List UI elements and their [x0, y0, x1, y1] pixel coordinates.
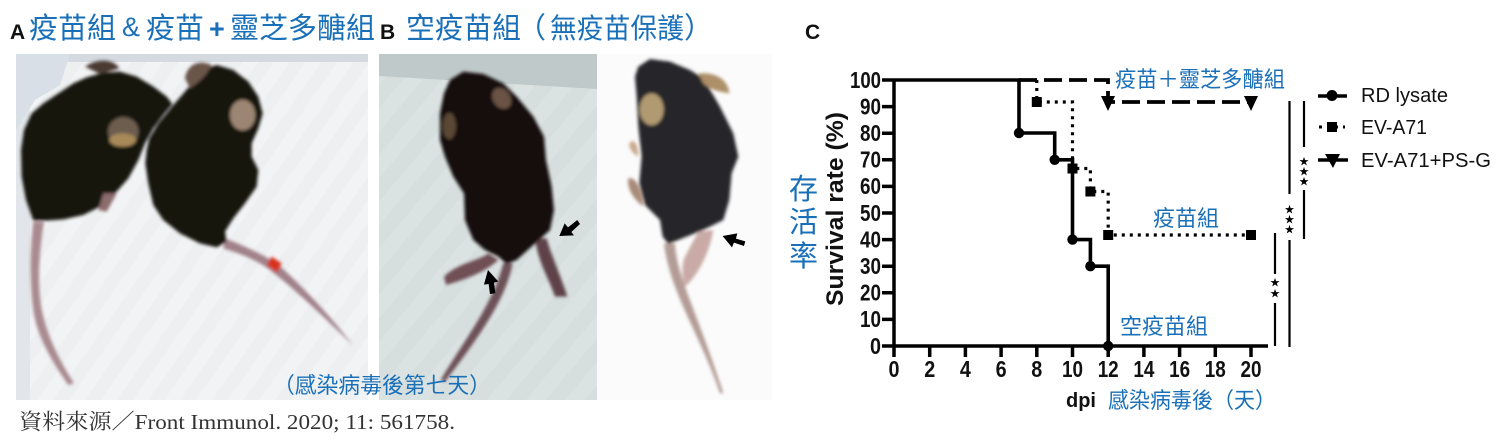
significance brackets: ★ — [1284, 212, 1295, 226]
heading: panel B: ） — [684, 13, 713, 45]
heading: panel A: 疫苗 — [146, 12, 204, 45]
heading: panel B: 空疫苗組 — [406, 12, 521, 45]
series: RD lysate solid — [894, 80, 1113, 351]
heading: panel A: & — [122, 12, 140, 42]
x tick labels: 10 — [1062, 356, 1083, 382]
y tick labels: 70 — [860, 146, 881, 172]
heading: panel B: 無疫苗保護 — [550, 13, 684, 44]
y axis label: Survival rate: Survival rate (%) — [822, 112, 849, 306]
arrow: right hind leg — [559, 220, 580, 236]
y tick labels: 10 — [860, 306, 881, 332]
chart: survival curves — [789, 67, 1491, 413]
x tick labels: 4 — [960, 356, 971, 382]
heading: panel B — [380, 12, 713, 45]
significance brackets: ★ — [1270, 276, 1280, 290]
photo: unvaccinated mouse, white background — [597, 54, 772, 400]
y axis label: Chinese: 存 — [789, 173, 818, 206]
x tick labels — [888, 356, 1262, 382]
x tick labels: 12 — [1098, 356, 1119, 382]
significance brackets: ★ — [1299, 164, 1309, 178]
significance brackets: ★ — [1299, 154, 1309, 168]
heading: panel A: A — [10, 21, 25, 44]
x tick labels: 2 — [924, 356, 935, 382]
curve label: vaccine + PS-G: 疫苗＋靈芝多醣組 — [1115, 67, 1285, 92]
x tick labels: 0 — [888, 356, 900, 382]
photo: vaccinated mice — [16, 54, 368, 400]
x tick labels: 6 — [996, 356, 1007, 382]
caption: day 7 after infection: （感染病毒後第七天） — [273, 373, 491, 398]
significance brackets — [1270, 101, 1309, 347]
y axis label: Chinese: 活 — [789, 206, 818, 239]
significance brackets: ★ — [1284, 202, 1295, 216]
y tick labels: 60 — [860, 173, 881, 199]
series: EV-A71+PS-G dashed — [1019, 80, 1258, 111]
heading: panel A — [10, 12, 375, 45]
y tick labels: 0 — [870, 333, 881, 359]
legend: EV-A71+PS-G — [1361, 150, 1491, 172]
x tick labels: 18 — [1205, 356, 1226, 382]
arrow: left hind leg — [484, 270, 498, 294]
y tick labels: 20 — [860, 280, 881, 306]
arrow: right photo leg — [723, 233, 745, 247]
significance brackets: ★ — [1270, 286, 1280, 300]
legend: EV-A71 — [1361, 117, 1427, 139]
photo: unvaccinated mouse, grey background — [379, 54, 597, 400]
heading: panel A: + — [209, 14, 225, 44]
legend — [1318, 85, 1491, 172]
x tick labels: 14 — [1133, 356, 1155, 382]
y tick labels: 100 — [850, 67, 881, 93]
y tick labels: 80 — [860, 120, 881, 146]
source note: 資料來源／Front Immunol. 2020; 11: 561758. — [19, 410, 455, 434]
series: EV-A71 dotted — [1032, 80, 1256, 240]
y tick labels: 30 — [860, 253, 881, 279]
y tick labels: 50 — [860, 200, 881, 226]
x axis label: Chinese: 感染病毒後（天） — [1108, 388, 1276, 413]
heading: panel A: 靈芝多醣組 — [230, 12, 375, 45]
heading: panel C: C — [805, 21, 820, 44]
legend: RD lysate — [1361, 85, 1448, 107]
heading: panel B: B — [380, 21, 395, 44]
y tick labels — [850, 67, 881, 359]
heading: panel A: 疫苗組 — [29, 12, 116, 45]
x tick labels: 16 — [1169, 356, 1190, 382]
significance brackets: ★ — [1299, 174, 1309, 188]
heading: panel B: （ — [517, 13, 546, 45]
significance brackets: ★ — [1284, 222, 1295, 236]
y tick labels: 40 — [860, 226, 881, 252]
x tick labels: 8 — [1031, 356, 1042, 382]
curve label: empty vaccine: 空疫苗組 — [1120, 314, 1208, 339]
curve label: vaccine: 疫苗組 — [1153, 206, 1219, 231]
x axis label: dpi: dpi — [1066, 390, 1096, 412]
y axis label: Chinese: 率 — [789, 240, 818, 273]
x tick labels: 20 — [1240, 356, 1262, 382]
axes and ticks — [882, 78, 1268, 357]
y tick labels: 90 — [860, 94, 881, 120]
y axis label: Chinese — [789, 173, 818, 273]
